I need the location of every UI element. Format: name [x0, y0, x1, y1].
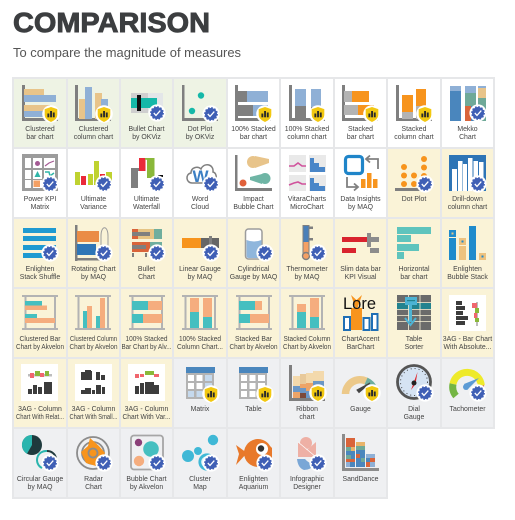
label: Column Chart... — [177, 344, 223, 351]
label: Dot Plot — [188, 126, 212, 133]
icon: rotating chart — [75, 225, 113, 262]
label: Ultimate — [134, 196, 159, 203]
label: 100% Stacked — [179, 336, 221, 343]
card: Cylindrical Gauge by MAQ — [228, 219, 279, 287]
label: Bullet Chart — [128, 126, 165, 133]
icon: bubble akvelon — [131, 436, 166, 472]
card: 3AG Column Chart With Relat — [14, 359, 66, 427]
label: Chart — [85, 484, 102, 491]
card: Dial Gauge — [388, 359, 440, 427]
label: Drill-down — [452, 196, 483, 203]
card: ChartAccent BarChart — [335, 289, 386, 357]
label: Waterfall — [133, 204, 160, 211]
label: Clustered — [79, 126, 108, 133]
icon: impact bubble — [235, 155, 272, 191]
label: bar chart — [347, 134, 374, 141]
label: by MAQ — [295, 274, 320, 281]
icon: clustered column akvelon — [75, 295, 111, 330]
icon: vitara micro charts — [289, 155, 326, 191]
label: Ribbon — [296, 406, 318, 413]
card: Enlighten Stack Shuffle — [14, 219, 66, 287]
label: by MAQ — [28, 484, 53, 491]
card: 3AG Column Chart With Var — [121, 359, 172, 427]
card: 100% Stacked Column Chart — [174, 289, 226, 357]
label: Impact — [243, 196, 264, 203]
label: 100% Stacked — [285, 126, 329, 133]
card: 3AG Column Chart With Small — [68, 359, 119, 427]
icon: dial gauge — [398, 366, 434, 402]
label: Aquarium — [239, 484, 269, 491]
label: Gauge by MAQ — [230, 274, 278, 281]
card: Dot Plot by OKViz — [174, 79, 226, 147]
label: 3AG - Column — [72, 406, 115, 413]
label: Cluster — [189, 476, 212, 483]
icon: cylindrical gauge — [246, 229, 274, 262]
card: Enlighten Aquarium — [228, 429, 279, 497]
icon: word cloud: W — [192, 167, 209, 186]
label: Enlighten — [26, 266, 55, 273]
icon: dot plot — [395, 156, 434, 193]
label: 3AG - Column — [18, 406, 62, 413]
label: Chart With Relat... — [16, 414, 64, 421]
label: Chart With Var... — [122, 414, 171, 421]
icon: ultimate waterfall — [131, 158, 166, 193]
label: Thermometer — [286, 266, 328, 273]
icon: 100% stacked column — [289, 85, 327, 123]
icon: 100% stacked column akvelon — [182, 295, 218, 330]
card: Tachometer — [442, 359, 493, 427]
card: Table Sorter — [388, 289, 440, 357]
card: Thermometer by MAQ — [281, 219, 333, 287]
icon: stacked column akvelon — [289, 295, 325, 330]
label: ChartAccent — [342, 336, 380, 343]
label: column chart — [394, 134, 434, 141]
label: Power KPI — [24, 196, 56, 203]
label: Stacked — [348, 126, 373, 133]
icon: tachometer — [453, 372, 487, 402]
card: Gauge — [335, 359, 386, 427]
title: COMPARISON — [13, 7, 210, 38]
label: 100% Stacked — [126, 336, 168, 343]
label: by OKViz — [186, 134, 215, 141]
card: Bubble Chart by Akvelon — [121, 429, 172, 497]
label: BarChart — [347, 344, 374, 351]
card: VitaraCharts MicroChart — [281, 149, 333, 217]
icon: 3ag column variance — [128, 364, 165, 401]
card: 100% Stacked column chart — [281, 79, 333, 147]
panel: chart grid — [12, 77, 495, 499]
icon: bubble stack — [449, 226, 486, 260]
icon: drill-down column — [449, 155, 487, 193]
card: Impact Bubble Chart — [228, 149, 279, 217]
icon: fish — [236, 439, 274, 472]
icon: 3ag column small multiples — [75, 364, 112, 401]
label: Bullet — [138, 266, 155, 273]
label: Ultimate — [81, 196, 106, 203]
label: by MAQ — [188, 274, 213, 281]
card: Linear Gauge by MAQ — [174, 219, 226, 287]
label: Gauge — [404, 414, 425, 421]
icon: ribbon chart — [289, 365, 327, 402]
label: column chart — [74, 134, 113, 141]
label: Enlighten — [239, 476, 268, 483]
label: Dot Plot — [402, 196, 426, 203]
label: Map — [193, 484, 207, 491]
icon: sanddance — [342, 434, 379, 471]
label: 3AG - Bar Chart — [443, 336, 492, 343]
label: Enlighten — [453, 266, 482, 273]
icon: table sorter — [397, 295, 431, 330]
icon: stack shuffle — [23, 228, 59, 262]
card: Clustered Bar Chart by Akvelon — [14, 289, 66, 357]
card: Horizontal bar chart — [388, 219, 440, 287]
icon: linear gauge — [182, 236, 220, 262]
label: Radar — [84, 476, 104, 483]
icon: clustered column — [75, 85, 113, 123]
icon: 3ag bar chart — [449, 295, 486, 331]
label: Chart — [138, 274, 155, 281]
label: bar chart — [400, 274, 428, 281]
label: Bubble Stack — [447, 274, 488, 281]
label: Dial — [408, 406, 420, 413]
icon: stacked bar — [342, 85, 381, 123]
label: by OKViz — [132, 134, 161, 141]
card: Stacked Column Chart by Akvelon — [281, 289, 333, 357]
label: SandDance — [342, 476, 379, 483]
card: Stacked column chart — [388, 79, 440, 147]
card: Dot Plot — [388, 149, 440, 217]
icon: dot plot okviz — [182, 85, 220, 123]
icon: cluster map — [182, 435, 220, 472]
label: Clustered — [25, 126, 55, 133]
label: by MAQ — [81, 274, 107, 281]
card: Circular Gauge by MAQ — [14, 429, 66, 497]
icon: 100% stacked bar akvelon — [129, 295, 165, 330]
label: Clustered Bar — [20, 336, 61, 343]
icon: circular gauge — [22, 435, 59, 472]
card: Ultimate Variance — [68, 149, 119, 217]
label: Word — [192, 196, 208, 203]
card: Bullet Chart by OKViz — [121, 79, 172, 147]
label: Mekko — [457, 126, 478, 133]
label: Designer — [293, 484, 321, 491]
card: SandDance — [335, 429, 386, 497]
card: Bullet Chart — [121, 219, 172, 287]
label: Stack Shuffle — [20, 274, 60, 281]
icon: matrix — [186, 367, 220, 403]
icon: infographic designer — [297, 437, 327, 472]
label: column chart — [448, 204, 487, 211]
label: Infographic — [290, 476, 325, 483]
card: Matrix — [174, 359, 226, 427]
card: Drill-down column chart — [442, 149, 493, 217]
card: Word Cloud — [174, 149, 226, 217]
label: Stacked Bar — [235, 336, 273, 343]
label: Tachometer — [450, 406, 486, 413]
icon: ultimate variance — [75, 161, 113, 193]
label: Data Insights — [340, 196, 381, 203]
card: 3AG Bar Chart With Absolute — [442, 289, 493, 357]
label: Chart by Akvelon — [16, 344, 64, 351]
card: Data Insights by MAQ — [335, 149, 386, 217]
label: MicroChart — [290, 204, 324, 211]
label: Bubble Chart — [233, 204, 274, 211]
card: Power KPI Matrix — [14, 149, 66, 217]
label: Chart by Akvelon — [283, 344, 331, 351]
label: Rotating Chart — [71, 266, 116, 273]
icon: thermometer — [302, 225, 327, 262]
label: bar chart — [26, 134, 54, 141]
card: 100% Stacked Bar Chart by Akvelon — [121, 289, 172, 357]
card: Ultimate Waterfall — [121, 149, 172, 217]
label: 3AG - Column — [125, 406, 168, 413]
card: Mekko Chart — [442, 79, 493, 147]
label: Chart by Akvelon — [230, 344, 278, 351]
label: Circular Gauge — [17, 476, 63, 483]
label: VitaraCharts — [288, 196, 327, 203]
label: Cloud — [191, 204, 209, 211]
label: Table — [245, 406, 262, 413]
label: Gauge — [350, 406, 371, 413]
label: Clustered Column — [70, 336, 117, 343]
label: Linear Gauge — [179, 266, 221, 273]
card: Cluster Map — [174, 429, 226, 497]
icon: bullet okviz — [131, 93, 166, 122]
icon: table — [239, 367, 274, 403]
label: Stacked Column — [284, 336, 331, 343]
card: Infographic Designer — [281, 429, 333, 497]
label: Variance — [80, 204, 107, 211]
label: KPI Visual — [345, 274, 377, 281]
card: Clustered Column Chart by Akvelon — [68, 289, 119, 357]
icon: chartaccent lore: Lore — [343, 294, 376, 313]
card: Clustered bar chart — [14, 79, 66, 147]
icon: power kpi matrix — [22, 154, 59, 193]
label: Matrix — [191, 406, 210, 413]
label: Stacked — [402, 126, 427, 133]
icon: data insights — [346, 156, 378, 190]
icon: mekko — [450, 86, 487, 122]
card: Radar Chart — [68, 429, 119, 497]
icon: bullet chart — [132, 229, 166, 262]
icon: 3ag column relative — [21, 364, 58, 401]
label: Slim data bar — [340, 266, 381, 273]
card: Ribbon chart — [281, 359, 333, 427]
card: Clustered column chart — [68, 79, 119, 147]
label: by MAQ — [348, 204, 374, 211]
label: Horizontal — [398, 266, 430, 273]
icon: clustered bar — [22, 85, 60, 123]
label: Bar Chart by Alv... — [122, 344, 172, 351]
label: Cylindrical — [238, 266, 270, 273]
label: Table — [406, 336, 422, 343]
icon: stacked bar akvelon — [236, 295, 272, 330]
icon: horizontal bars — [397, 227, 431, 259]
icon: 100% stacked bar — [235, 85, 274, 123]
card: Slim data bar KPI Visual — [335, 219, 386, 287]
card: Table — [228, 359, 279, 427]
label: With Absolute... — [444, 344, 492, 351]
label: chart — [299, 414, 315, 421]
label: Sorter — [405, 344, 424, 351]
card: Rotating Chart by MAQ — [68, 219, 119, 287]
icon: slim data bar — [342, 233, 379, 253]
label: 100% Stacked — [231, 126, 276, 133]
label: Chart — [459, 134, 476, 141]
card: 100% Stacked bar chart — [228, 79, 279, 147]
card: Stacked Bar Chart by Akvelon — [228, 289, 279, 357]
card: Enlighten Bubble Stack — [442, 219, 493, 287]
label: bar chart — [240, 134, 267, 141]
subtitle: To compare the magnitude of measures — [13, 45, 241, 60]
label: column chart — [287, 134, 327, 141]
label: Chart With Small... — [70, 414, 118, 421]
icon: radar — [77, 437, 113, 472]
label: Bubble Chart — [126, 476, 167, 483]
card: Stacked bar chart — [335, 79, 386, 147]
icon: stacked column — [396, 85, 434, 123]
label: Matrix — [31, 204, 50, 211]
icon: clustered bar akvelon — [22, 295, 58, 330]
label: Chart by Akvelon — [70, 344, 118, 351]
icon: gauge — [346, 380, 381, 402]
label: by Akvelon — [130, 484, 163, 491]
